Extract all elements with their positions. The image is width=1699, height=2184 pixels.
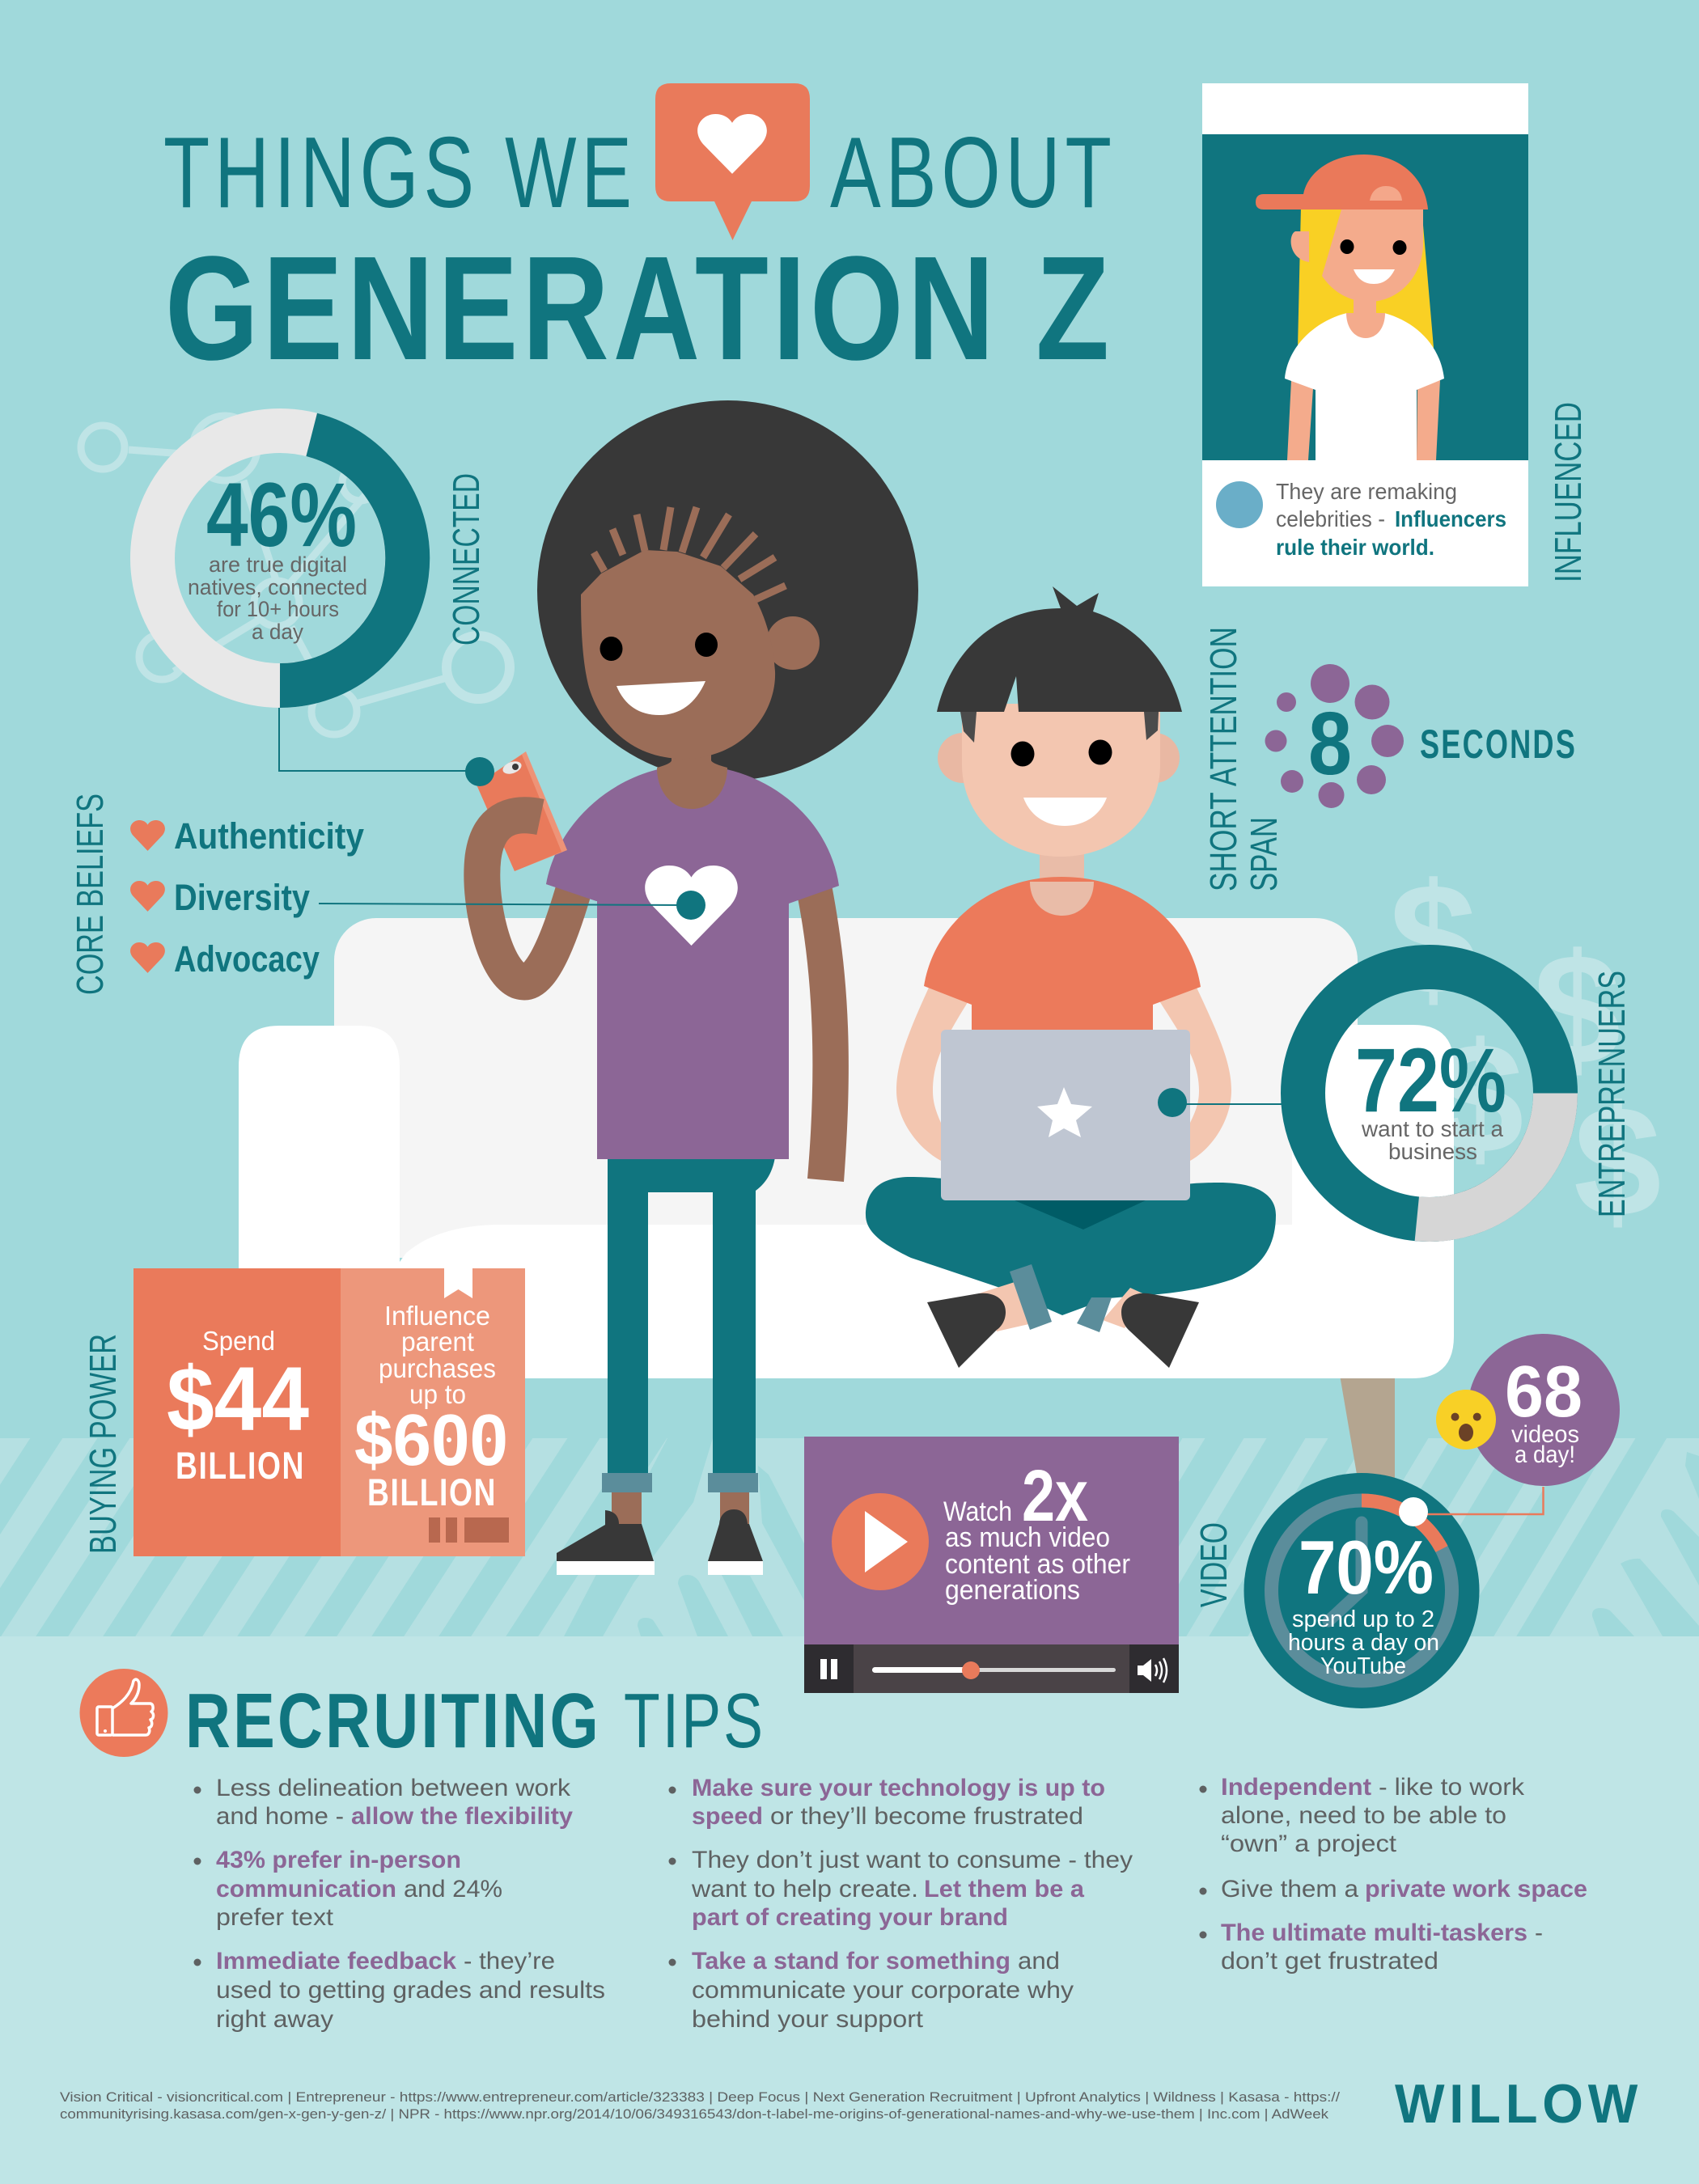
boy character <box>866 586 1276 1368</box>
background network graphic <box>81 416 510 734</box>
neck <box>672 728 711 785</box>
right arm <box>797 885 849 1182</box>
clock face <box>1244 1473 1479 1708</box>
ears <box>938 733 1180 783</box>
connector: diversity to heart <box>319 891 705 920</box>
cuffs <box>1010 1264 1112 1332</box>
tips column two: or they’ll become frustrated <box>770 1803 1083 1830</box>
tips column two: Take a stand for something <box>692 1948 1011 1974</box>
tips column three: don’t get frustrated <box>1221 1948 1438 1974</box>
right shoe <box>708 1509 763 1575</box>
icon: heart speech bubble <box>655 83 810 240</box>
tips column one: 43% prefer in-person <box>216 1847 461 1873</box>
portrait <box>1256 154 1444 460</box>
stat: youtube clock <box>1244 1473 1544 1708</box>
label: short attention span: SPAN <box>1243 817 1285 891</box>
crossed legs <box>866 1177 1276 1315</box>
tips column two: communicate your corporate why <box>692 1977 1074 2004</box>
connector to laptop <box>1158 1088 1282 1117</box>
tips column two: They don’t just want to consume - they <box>692 1847 1133 1873</box>
video text: as much video <box>945 1522 1110 1553</box>
left panel <box>133 1268 341 1556</box>
right panel <box>341 1268 525 1556</box>
tips column two: speed <box>692 1803 763 1830</box>
description: business <box>1388 1139 1477 1164</box>
laptop <box>941 1030 1190 1200</box>
pause button <box>804 1644 854 1693</box>
description <box>1511 1421 1579 1468</box>
caption <box>1276 479 1506 560</box>
donut ring <box>1303 967 1556 1220</box>
smile <box>1023 798 1107 826</box>
eyes <box>1011 739 1112 767</box>
left shoe <box>557 1510 655 1575</box>
spend text <box>167 1326 309 1487</box>
icon: surprised emoji <box>1436 1390 1496 1450</box>
tips column one: communication <box>216 1876 396 1903</box>
connector line to phone <box>279 708 480 771</box>
video player panel <box>804 1437 1179 1693</box>
orange shirt <box>924 877 1201 1052</box>
tips column one: Immediate feedback <box>216 1948 456 1974</box>
unit: SECONDS <box>1420 722 1577 767</box>
label: buying power: BUYING POWER <box>82 1334 124 1554</box>
smile <box>616 681 705 715</box>
tips column three <box>1199 1774 1587 1974</box>
core beliefs <box>69 794 364 995</box>
couch <box>239 918 1454 1488</box>
dots <box>1265 664 1404 808</box>
hair <box>537 400 918 781</box>
dollar sign background graphics: $ <box>1533 921 1621 1098</box>
label: entreprenuers: ENTREPRENUERS <box>1591 971 1633 1217</box>
description <box>188 552 367 644</box>
ear <box>766 616 820 670</box>
tips column one: prefer text <box>216 1904 334 1931</box>
raised arm <box>482 815 576 982</box>
description: for 10+ hours <box>217 597 339 621</box>
couch left arm <box>239 1026 400 1294</box>
description: are true digital <box>209 552 347 577</box>
caption: celebrities - <box>1276 506 1385 531</box>
number: 68 <box>1505 1352 1582 1433</box>
caption: They are remaking <box>1276 479 1457 504</box>
sideburns <box>960 712 1159 743</box>
shoes <box>927 1293 1199 1368</box>
label: short attention span: SHORT ATTENTION <box>1202 627 1244 891</box>
tips column two: Let them be a <box>924 1876 1084 1903</box>
couch right arm <box>1292 1025 1454 1294</box>
volume button <box>1129 1644 1179 1693</box>
clock hands <box>1328 1522 1362 1621</box>
label: influenced: INFLUENCED <box>1547 402 1589 582</box>
caption: Influencers <box>1395 506 1506 531</box>
progress bar <box>872 1661 1116 1679</box>
card background <box>1202 83 1528 586</box>
description: a day <box>252 620 303 644</box>
sources footer <box>60 2089 1340 2122</box>
floor stripes <box>0 1438 1699 1636</box>
heading: TIPS <box>624 1678 765 1764</box>
spend text: Spend <box>202 1326 275 1356</box>
belief list: Advocacy <box>174 938 320 980</box>
label: short attention span <box>1202 627 1285 891</box>
clock ring <box>1272 1500 1451 1681</box>
collar <box>657 760 727 809</box>
influencer card <box>1202 83 1528 586</box>
play icon <box>832 1493 929 1590</box>
control bar <box>804 1644 1179 1693</box>
donut ring <box>152 430 408 686</box>
tips column two: want to help create. <box>691 1876 918 1903</box>
portrait backdrop <box>1202 134 1528 460</box>
recruiting tips section <box>79 1669 1587 2033</box>
tips column three: private work space <box>1365 1876 1587 1903</box>
spend text: BILLION <box>176 1444 305 1487</box>
ankles <box>612 1492 749 1526</box>
couch back <box>334 918 1358 1258</box>
player screen <box>804 1437 1179 1644</box>
title <box>163 83 1116 391</box>
label: connected: CONNECTED <box>445 473 487 645</box>
ankles <box>979 1282 1148 1331</box>
belief list: Authenticity <box>174 815 364 857</box>
connector to 68 bubble <box>1413 1487 1544 1514</box>
tips column one <box>194 1775 605 2033</box>
stat: entrepreneurs donut <box>1158 967 1556 1220</box>
title line two: GENERATION Z <box>165 225 1113 391</box>
influence text: parent <box>401 1327 474 1357</box>
tips column one: used to getting grades and results <box>216 1977 605 2004</box>
tips column one: right away <box>216 2006 333 2033</box>
phone <box>477 751 567 871</box>
eyes <box>600 633 718 661</box>
collar <box>1030 882 1094 916</box>
purple shirt <box>546 765 839 1159</box>
face <box>962 704 1160 857</box>
tips column two: Make sure your technology is up to <box>692 1775 1105 1801</box>
tips column one: allow the flexibility <box>351 1803 573 1830</box>
tips column two <box>668 1775 1133 2033</box>
tips column three: - <box>1535 1919 1543 1946</box>
heading: RECRUITING <box>185 1678 601 1764</box>
connector dot <box>465 757 494 786</box>
dollar sign background graphics: $ <box>1574 1073 1661 1250</box>
video text: content as other <box>945 1549 1130 1580</box>
description: spend up to 2 <box>1292 1606 1434 1632</box>
percent: 72% <box>1355 1030 1506 1131</box>
tips column one: Less delineation between work <box>216 1775 571 1801</box>
sources footer: Vision Critical - visioncritical.com | Entrepreneur - https://www.entrepreneur.com/article/323383 | Deep Focus | Next Generation Recruitment | Upfront Analytics | Wildness | Kasasa - https:// <box>60 2089 1340 2105</box>
couch leg <box>1340 1375 1395 1488</box>
belief list: Diversity <box>174 877 310 918</box>
dollar sign background graphics: $ <box>1389 851 1477 1027</box>
logo: willow: WILLOW <box>1395 2073 1642 2135</box>
tips column one: and home - <box>216 1803 344 1830</box>
tips column three: “own” a project <box>1221 1831 1397 1857</box>
stat: connected donut <box>152 430 494 786</box>
girl character <box>477 400 918 1575</box>
shirt sleeve over arm <box>546 859 603 901</box>
description <box>1288 1606 1439 1679</box>
sources footer: communityrising.kasasa.com/gen-x-gen-y-gen-z/ | NPR - https://www.npr.org/2014/10/06/349316543/don-t-label-me-origins-of-generational-names-and-why-we-use-them | Inc.com | AdWeek <box>60 2106 1329 2122</box>
stat: 8 seconds <box>1265 664 1577 808</box>
tips column three: Independent <box>1221 1774 1371 1801</box>
influence text: BILLION <box>367 1471 497 1513</box>
neck <box>1040 841 1084 898</box>
dollar sign background graphics: $ <box>1436 1010 1523 1187</box>
influence text <box>354 1301 508 1513</box>
video text: 2x <box>1022 1456 1088 1537</box>
video text <box>943 1456 1130 1606</box>
bubble <box>1468 1334 1620 1486</box>
arms <box>896 967 1231 1161</box>
leg shadow <box>1015 1200 1146 1230</box>
icon: shirt heart <box>645 866 738 946</box>
icon: bookmark <box>444 1268 472 1298</box>
influence text: purchases <box>379 1353 496 1383</box>
barcode marks <box>429 1517 509 1543</box>
avatar dot <box>1216 481 1263 528</box>
tips column three: alone, need to be able to <box>1221 1802 1506 1829</box>
stat: 68 videos bubble <box>1436 1334 1620 1486</box>
icon: thumbs up <box>79 1669 168 1757</box>
influence text: $600 <box>354 1400 508 1481</box>
bottom panel background <box>0 1636 1699 2184</box>
description <box>1361 1116 1503 1164</box>
tips column two: behind your support <box>692 2006 924 2033</box>
caption: rule their world. <box>1276 535 1434 560</box>
description: a day! <box>1515 1441 1575 1468</box>
percent: 46% <box>206 464 357 565</box>
tips column three: The ultimate multi-taskers <box>1221 1919 1527 1946</box>
description: hours a day on <box>1288 1630 1439 1656</box>
clock marker <box>1399 1497 1428 1526</box>
rotated label: CORE BELIEFS <box>69 794 111 995</box>
video text: generations <box>945 1575 1080 1606</box>
trouser cuffs <box>602 1473 758 1492</box>
description: YouTube <box>1320 1653 1406 1679</box>
tips column one: and 24% <box>404 1876 502 1903</box>
tips column three: Give them a <box>1221 1876 1358 1903</box>
progress arc <box>1362 1500 1442 1549</box>
icon: hearts <box>130 820 165 973</box>
couch seat <box>239 1225 1454 1378</box>
number: 8 <box>1308 694 1352 794</box>
spend text: $44 <box>167 1348 309 1450</box>
description: natives, connected <box>188 575 367 599</box>
hair <box>937 586 1182 712</box>
description: want to start a <box>1361 1116 1503 1141</box>
face <box>581 550 775 759</box>
belief list <box>174 815 364 980</box>
influence text: Influence <box>384 1301 490 1331</box>
title line one left: THINGS WE <box>163 117 637 229</box>
label: video: VIDEO <box>1193 1522 1235 1607</box>
tips column two: and <box>1018 1948 1060 1974</box>
tips column three: - like to work <box>1379 1774 1525 1801</box>
braids <box>594 507 786 599</box>
video text: Watch <box>943 1496 1012 1527</box>
tips column one: - they’re <box>464 1948 555 1974</box>
influence text: up to <box>409 1379 466 1409</box>
percent: 70% <box>1299 1525 1434 1610</box>
title line one right: ABOUT <box>830 117 1116 229</box>
description: videos <box>1511 1421 1579 1448</box>
tips column two: part of creating your brand <box>692 1904 1008 1931</box>
dollar sign background graphics <box>1389 851 1661 1250</box>
buying power box <box>133 1268 525 1556</box>
pants <box>608 1149 776 1474</box>
